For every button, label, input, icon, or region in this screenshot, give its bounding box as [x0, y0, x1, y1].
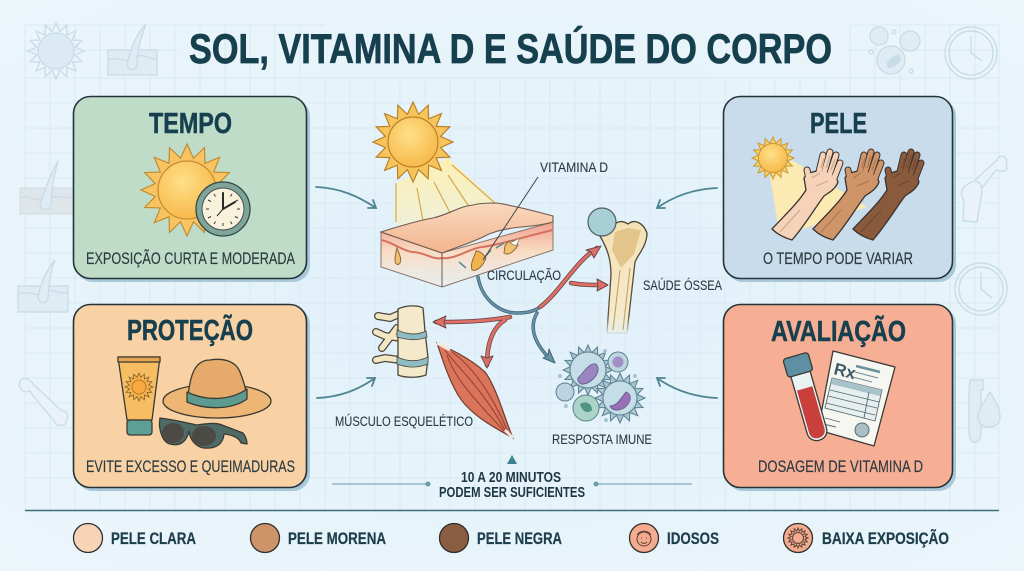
label: vitamina d: VITAMINA D	[540, 160, 608, 175]
label: musculo esqueletico: MÚSCULO ESQUELÉTICO	[335, 414, 473, 429]
illustration: femur	[588, 208, 647, 333]
panel: protecao	[74, 304, 310, 491]
rx symbol: Rx	[832, 359, 858, 383]
icon: faint tube and drop	[969, 380, 1000, 442]
illustration: sun rays	[394, 158, 505, 250]
icon: sunglasses	[159, 418, 247, 448]
callout: 10 a 20 minutos: 10 A 20 MINUTOS	[461, 469, 561, 486]
panel: pele	[724, 96, 956, 282]
label: saude ossea: SAÚDE ÓSSEA	[643, 278, 722, 293]
legend: pele morena: PELE MORENA	[288, 530, 386, 548]
heading: tempo: TEMPO	[149, 108, 232, 140]
callout: 10 a 20 minutos	[332, 455, 692, 501]
icon: light arm	[772, 152, 840, 240]
caption: avaliacao: DOSAGEM DE VITAMINA D	[758, 458, 923, 476]
callout: 10 a 20 minutos: PODEM SER SUFICIENTES	[439, 484, 585, 501]
icon: sunscreen tube	[118, 357, 160, 435]
title: SOL, VITAMINA D E SAÚDE DO CORPO	[189, 24, 832, 72]
arrow: tempo to skin	[316, 187, 376, 208]
icon: faint bone	[19, 378, 67, 426]
heading: pele: PELE	[810, 108, 867, 140]
legend: idosos	[630, 524, 719, 552]
caption: pele: O TEMPO PODE VARIAR	[763, 250, 913, 268]
icon: faint clock top	[945, 27, 997, 79]
illustration: immune cells	[556, 345, 645, 423]
label: circulacao: CIRCULAÇÃO	[487, 268, 561, 283]
icon: faint skin hair	[108, 24, 157, 75]
legend: pele negra: PELE NEGRA	[477, 530, 562, 548]
panel: avaliacao	[724, 304, 956, 491]
icon: faint skin left	[20, 161, 73, 214]
icon: sun beam	[752, 137, 867, 237]
icon: faint skin lower left	[18, 260, 68, 312]
icon: faint clock lower	[955, 263, 1007, 315]
icon: sun and clock	[141, 144, 250, 236]
leader line: vitamina d	[483, 177, 538, 260]
icon: sun hat	[163, 359, 271, 418]
icon: faint knee joint	[961, 156, 1007, 222]
legend: idosos: IDOSOS	[667, 530, 719, 548]
arrows: circulation	[433, 246, 608, 368]
illustration: skin block	[381, 203, 553, 287]
arrow: protecao to spine	[317, 378, 375, 398]
caption: protecao: EVITE EXCESSO E QUEIMADURAS	[86, 458, 295, 476]
legend: pele clara	[74, 524, 196, 552]
icon: faint cells	[869, 27, 920, 74]
legend: pele negra	[440, 524, 562, 552]
legend: baixa exposicao: BAIXA EXPOSIÇÃO	[822, 528, 949, 548]
divider	[25, 510, 999, 512]
heading: avaliacao: AVALIAÇÃO	[771, 314, 906, 348]
panel: tempo	[74, 96, 310, 282]
legend: pele morena	[250, 524, 386, 552]
heading: protecao: PROTEÇÃO	[127, 313, 253, 347]
icon: lab report	[818, 351, 895, 446]
illustration: muscle	[437, 343, 513, 438]
legend: baixa exposicao	[784, 524, 949, 552]
caption: tempo: EXPOSIÇÃO CURTA E MODERADA	[86, 248, 295, 268]
arrow: pele to skin	[657, 188, 717, 208]
arrow: avaliacao to immune	[657, 378, 717, 398]
illustration: spine	[376, 306, 428, 377]
icon: blood tube	[783, 352, 832, 444]
label: resposta imune: RESPOSTA IMUNE	[552, 432, 652, 447]
icon: faint sun	[28, 23, 84, 79]
legend: pele clara: PELE CLARA	[111, 530, 196, 548]
icon: dark arm	[853, 152, 921, 240]
illustration: sun	[373, 102, 453, 182]
icon: medium arm	[813, 152, 881, 240]
